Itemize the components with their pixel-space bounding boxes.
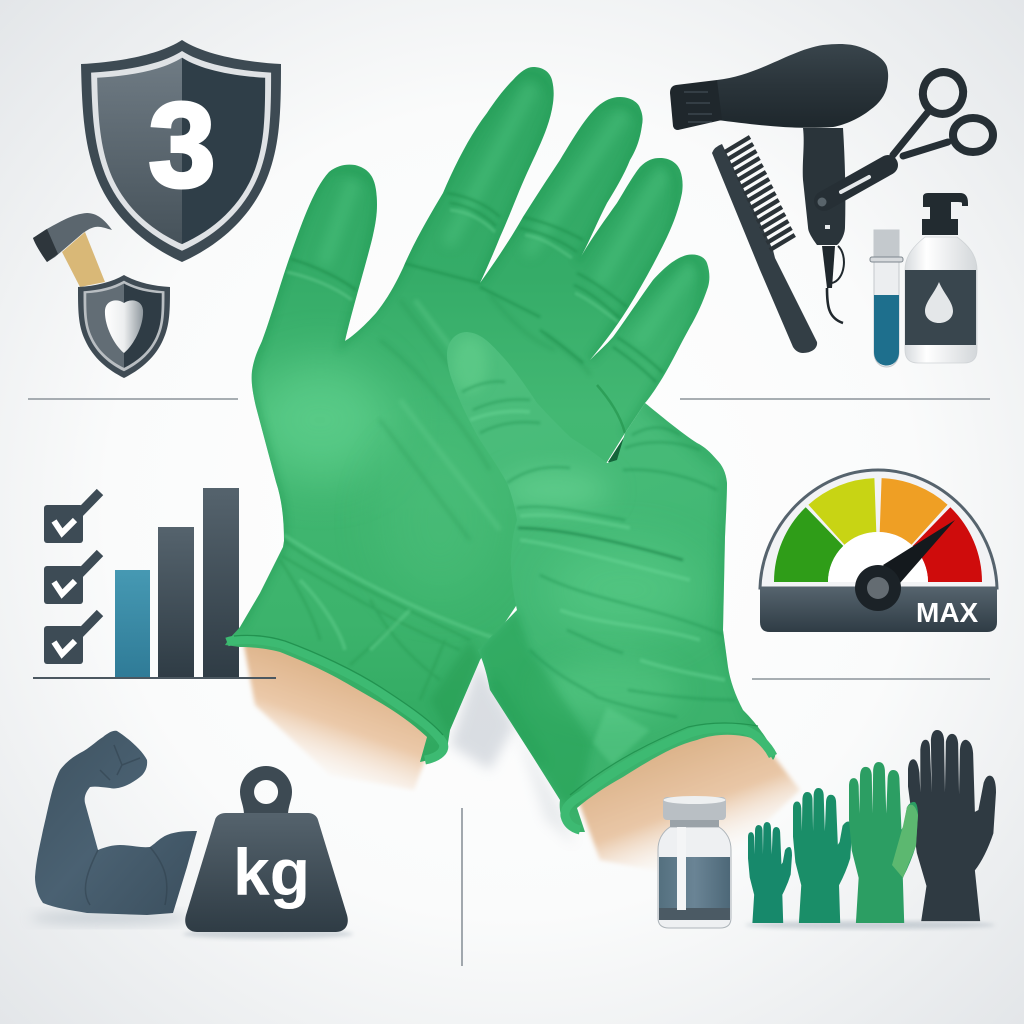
left cuff rim bbox=[227, 635, 444, 760]
glove size XL bbox=[908, 730, 996, 921]
bar: medium bbox=[158, 527, 194, 677]
shadow between gloves bbox=[450, 660, 515, 770]
arm muscle and fist lines bbox=[85, 745, 167, 905]
glove size L bbox=[849, 762, 918, 923]
back-of-hand highlights bbox=[560, 551, 690, 630]
gauge needle bbox=[883, 520, 955, 583]
heart bbox=[105, 300, 143, 353]
checkbox 1 bbox=[44, 492, 100, 543]
pump head bbox=[922, 193, 968, 235]
MAX label: MAX bbox=[916, 597, 979, 628]
glove size S bbox=[748, 822, 792, 923]
icon: shield with number 3 bbox=[81, 40, 281, 262]
checkbox 3 bbox=[44, 613, 100, 664]
icon: flexed arm bbox=[30, 731, 197, 925]
icon: test tube bbox=[870, 230, 903, 367]
icon: vial bbox=[658, 796, 731, 928]
forearm: right bbox=[578, 725, 800, 880]
dryer body bbox=[717, 44, 888, 128]
wrist folds bbox=[282, 544, 467, 676]
icon: hair comb bbox=[712, 137, 817, 353]
icon: hair dryer bbox=[670, 44, 888, 323]
icon: pump bottle bbox=[905, 193, 977, 363]
icon: size range gloves bbox=[745, 730, 996, 929]
pinky base rim bbox=[597, 385, 625, 433]
bar: tall bbox=[203, 488, 239, 677]
glove size L thumb highlight bbox=[892, 805, 918, 878]
left glove bbox=[225, 67, 710, 764]
thumb crease bbox=[291, 259, 356, 290]
palm folds bbox=[382, 424, 396, 441]
chart baseline bbox=[33, 677, 276, 679]
front cuff rim bbox=[565, 723, 773, 830]
darker cuff panel bbox=[478, 610, 593, 808]
gauge segment: orange bbox=[880, 478, 948, 545]
edge shading bbox=[490, 403, 760, 765]
glove size M bbox=[793, 788, 852, 923]
light cuff panel bbox=[594, 710, 648, 763]
number 3: 3 bbox=[149, 78, 215, 212]
bar: teal bbox=[115, 570, 150, 677]
glove edge shading bbox=[240, 73, 703, 627]
back folds bbox=[462, 382, 735, 717]
icon: scissors bbox=[818, 66, 993, 206]
gauge hub bbox=[855, 565, 901, 611]
gauge dial white center bbox=[828, 532, 928, 582]
checkbox 2 bbox=[44, 553, 100, 604]
wrist shadow bbox=[434, 647, 480, 732]
gauge segment: yellow bbox=[808, 478, 876, 545]
dryer nozzle bbox=[670, 80, 722, 130]
dark gap between thumb and pinky bbox=[608, 434, 628, 465]
forearm: left bbox=[242, 635, 440, 790]
gauge segment: red bbox=[913, 507, 982, 582]
icon: bar chart with checklist bbox=[44, 488, 239, 677]
finger highlights bbox=[325, 90, 690, 340]
icon: gauge bbox=[760, 470, 997, 632]
gauge segment: green bbox=[774, 507, 843, 582]
dryer handle and cord bbox=[803, 128, 845, 323]
kg label: kg bbox=[233, 835, 310, 909]
gauge base bbox=[760, 588, 997, 632]
water drop bbox=[925, 282, 953, 323]
front glove bbox=[447, 332, 777, 834]
palm highlights bbox=[250, 360, 390, 480]
divider lines bbox=[28, 399, 990, 966]
icon: kg weight bbox=[183, 766, 353, 939]
finger creases bbox=[403, 193, 663, 382]
shadow under right cuff bbox=[515, 725, 575, 845]
icon: small shield with heart bbox=[78, 275, 170, 378]
icon: hammer bbox=[33, 213, 112, 287]
